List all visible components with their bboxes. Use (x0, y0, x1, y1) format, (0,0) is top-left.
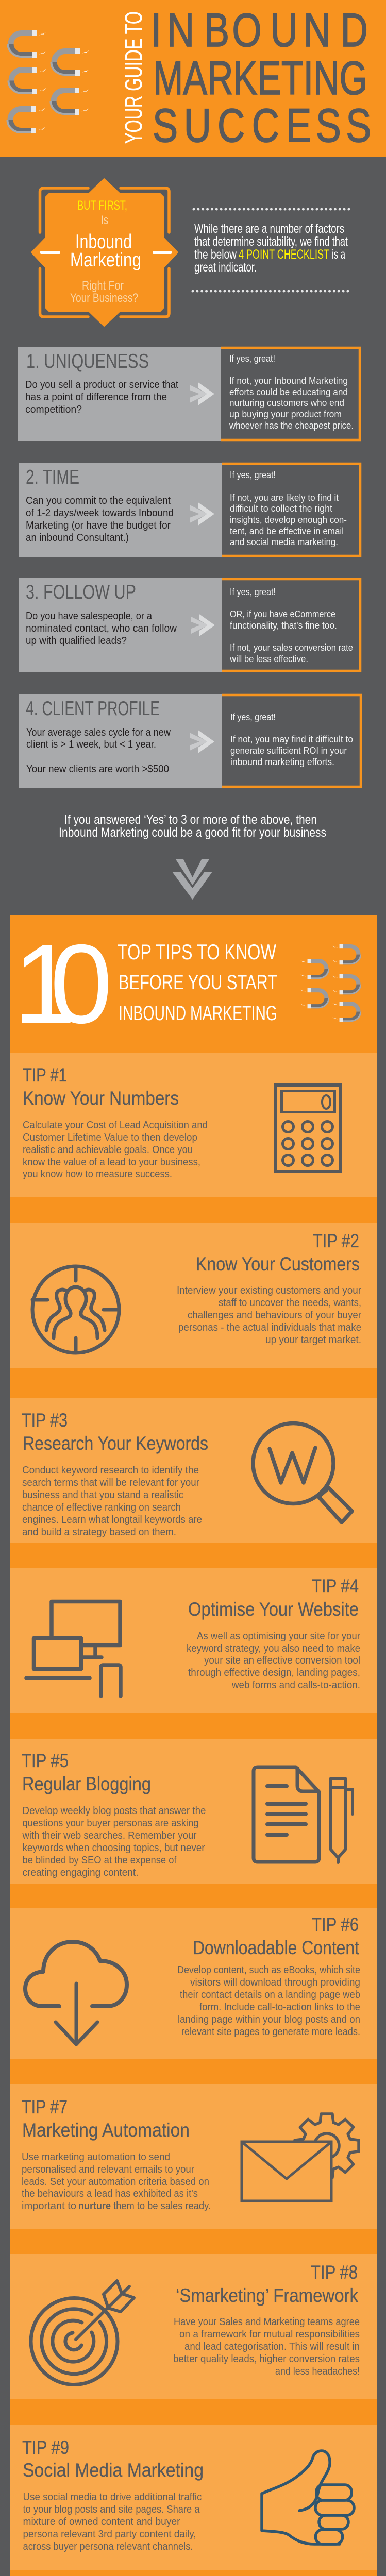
tip 4: TIP #4 (312, 1575, 359, 1597)
tip 6: Downloadable Content (193, 1937, 360, 1958)
panel: 4 client profile: inbound marketing efforts. (230, 757, 334, 767)
tip 9: persona relevant 3rd party content daily, (23, 2529, 196, 2540)
conclusion text (59, 812, 326, 840)
panel: 2 time (19, 463, 360, 557)
tip 4: web forms and calls-to-action. (231, 1680, 360, 1691)
tip 5: be blinded by SEO at the expense of (23, 1855, 177, 1866)
tip 9: mixture of owned content and buyer (23, 2516, 180, 2528)
icon: double chevron (190, 382, 214, 405)
tip 2: TIP #2 (313, 1230, 359, 1251)
tip 8: TIP #8 (311, 2262, 358, 2283)
title: inbound marketing success (151, 4, 371, 152)
panel: 1 uniqueness: has a point of difference from the (25, 392, 167, 403)
panel: 4 client profile: 4. CLIENT PROFILE (26, 698, 160, 720)
panel: 2 time: Marketing (or have the budget for (26, 520, 171, 531)
tip 6: form. Include call-to-action links to the (199, 2002, 360, 2013)
tip 1: TIP #1 (23, 1064, 67, 1086)
callout: but first: Inbound (75, 231, 132, 253)
panel: 3 follow up: functionality, that's fine too. (230, 620, 337, 631)
tip 4: Optimise Your Website (188, 1599, 359, 1620)
callout: but first (31, 179, 178, 326)
panel: 3 follow up (19, 578, 360, 672)
tip 1: realistic and achievable goals. Once you (23, 1144, 193, 1156)
heading: 10 top tips: 0 (50, 922, 112, 1047)
tip 8: better quality leads, higher conversion rates (173, 2353, 360, 2365)
heading: 10 top tips: BEFORE YOU START (119, 971, 277, 994)
intro paragraph: is a (332, 247, 345, 262)
tip 5: with their web searches. Remember your (22, 1830, 197, 1841)
panel: 2 time: Can you commit to the equivalent (26, 495, 171, 506)
panel: 4 client profile: If yes, great! (230, 712, 276, 722)
panel: 3 follow up: nominated contact, who can follow (26, 623, 177, 634)
panel: 1 uniqueness: competition? (25, 404, 82, 415)
tip 2: personas - the actual individuals that make (178, 1322, 361, 1333)
icon: devices (26, 1601, 121, 1696)
panel: 3 follow up: up with qualified leads? (26, 635, 127, 647)
icon: target and arrow (31, 2281, 134, 2384)
tip 8: and less headaches! (275, 2366, 360, 2377)
icon: email and gear (242, 2114, 359, 2201)
tip 9: Social Media Marketing (23, 2460, 204, 2481)
icon: customer target (32, 1266, 119, 1353)
panel: 2 time: 2. TIME (26, 466, 79, 488)
tip 4: As well as optimising your site for your (197, 1631, 360, 1642)
panel: 3 follow up: Do you have salespeople, or a (26, 611, 153, 622)
panel: 3 follow up: If yes, great! (230, 587, 276, 597)
callout: but first: BUT FIRST, (77, 198, 127, 213)
icon: magnifier (253, 1423, 352, 1522)
icon: large down chevron (172, 859, 212, 900)
panel: 1 uniqueness: Do you sell a product or service that (25, 379, 178, 391)
intro paragraph: the below (194, 247, 237, 262)
tip 4 (10, 1568, 377, 1713)
header banner (0, 0, 386, 157)
tip 7: Marketing Automation (22, 2120, 190, 2141)
tip 1: you know how to measure success. (23, 1168, 172, 1180)
tip 9: Use social media to drive additional traffic (23, 2492, 202, 2503)
intro paragraph (194, 222, 348, 275)
icon: double chevron (190, 503, 214, 526)
tip 3: search terms that will be relevant for your (22, 1477, 199, 1488)
tip 5: keywords when choosing topics, but never (23, 1842, 205, 1854)
tip 2: Interview your existing customers and your (177, 1285, 361, 1296)
panel: 3 follow up: will be less effective. (229, 654, 308, 664)
tip 3: engines. Learn what longtail keywords are (22, 1514, 202, 1526)
title: inbound marketing success: SUCCESS (153, 99, 371, 152)
tip 3: and build a strategy based on them. (22, 1527, 176, 1538)
tip 5: Regular Blogging (22, 1773, 151, 1794)
panel: 4 client profile (19, 694, 361, 788)
panel: 2 time: tent, and be effective in email (230, 526, 344, 536)
panel: 4 client profile: client is > 1 week, but < 1 year. (26, 739, 156, 750)
tip 7: personalised and relevant emails to your (22, 2164, 194, 2175)
tip 9: TIP #9 (22, 2437, 69, 2458)
tip 7: nurture (78, 2200, 111, 2212)
panel: 2 time: difficult to collect the right (230, 503, 332, 514)
tip 9 (10, 2425, 377, 2570)
tip 2: up your target market. (265, 1334, 361, 1346)
icon: cloud download (25, 1942, 127, 2044)
callout: but first: Is (101, 213, 108, 227)
heading: 10 top tips (13, 922, 277, 1047)
callout: but first: Your Business? (70, 291, 138, 305)
tip 1 (10, 1053, 377, 1197)
conclusion text: Inbound Marketing could be a good fit for your business (59, 825, 326, 840)
tip 4: your site an effective conversion tool (204, 1655, 360, 1666)
panel: 1 uniqueness: up buying your product from (229, 409, 342, 419)
tip 1: know the value of a lead to your business, (23, 1157, 200, 1168)
tip 6: relevant site pages to generate more leads. (181, 2026, 360, 2038)
panel: 4 client profile: generate sufficient ROI in your (230, 745, 347, 756)
tip 3: Research Your Keywords (23, 1433, 208, 1454)
heading: 10 top tips: TOP TIPS TO KNOW (118, 940, 276, 964)
panel: 2 time: If not, you are likely to find it (230, 493, 339, 503)
tip 3: business and that you stand a realistic (22, 1489, 183, 1501)
panel: 1 uniqueness: If not, your Inbound Marketing (229, 376, 348, 386)
intro paragraph: great indicator. (194, 260, 257, 275)
tip 8: Have your Sales and Marketing teams agree (174, 2316, 360, 2328)
tip 7: leads. Set your automation criteria based on (22, 2176, 209, 2188)
tip 3: Conduct keyword research to identify the (22, 1465, 199, 1476)
callout: but first: Right For (82, 279, 124, 293)
tip 2 (10, 1223, 377, 1368)
panel: 1 uniqueness: If yes, great! (229, 353, 275, 364)
panel: 1 uniqueness: nurturing customers who end (229, 398, 344, 408)
tip 5: TIP #5 (22, 1750, 69, 1771)
tip 8: and lead categorisation. This will result in (184, 2341, 360, 2352)
panel: 4 client profile: Your average sales cycle for a new (26, 727, 171, 738)
tip 8: ‘Smarketing’ Framework (176, 2285, 358, 2306)
tip 2: challenges and behaviours of your buyer (188, 1310, 361, 1321)
tip 4: keyword strategy, you also need to make (187, 1643, 360, 1654)
tip 7: TIP #7 (22, 2096, 68, 2117)
tip 8: on a framework for mutual responsibilities (179, 2329, 360, 2340)
tip 7 (10, 2084, 377, 2229)
panel: 3 follow up: 3. FOLLOW UP (26, 581, 136, 603)
icon: double chevron (191, 614, 215, 637)
tip 6: landing page within your blog posts and on (178, 2014, 360, 2025)
icon: document and pen (254, 1767, 353, 1862)
panel: 3 follow up: If not, your sales conversion rate (230, 642, 353, 653)
panel: top tips (10, 915, 377, 2576)
icon: small magnets (300, 944, 361, 1022)
tip 6: their contact details on a landing page web (180, 1989, 360, 2001)
panel: 1 uniqueness (18, 347, 360, 441)
tip 3: chance of effective ranking on search (22, 1502, 181, 1513)
icon: calculator (275, 1085, 341, 1172)
tip 5: Develop weekly blog posts that answer the (23, 1805, 206, 1817)
tip 6: TIP #6 (312, 1914, 359, 1935)
conclusion text: If you answered ‘Yes’ to 3 or more of the above, then (64, 812, 317, 827)
panel: 1 uniqueness: 1. UNIQUENESS (26, 350, 149, 372)
icon: double chevron (190, 731, 214, 753)
tip 2: Know Your Customers (196, 1253, 360, 1275)
tip 8 (10, 2254, 377, 2399)
icon: thumbs up (262, 2451, 354, 2544)
panel: 2 time: and social media marketing. (230, 537, 338, 547)
tip 7: Use marketing automation to send (22, 2151, 170, 2163)
title: inbound marketing success: INBOUND (151, 4, 368, 57)
tip 2: staff to uncover the needs, wants, (219, 1297, 361, 1309)
tip 5: questions your buyer personas are asking (23, 1818, 199, 1829)
panel: 3 follow up: OR, if you have eCommerce (230, 609, 335, 619)
tip 3 (10, 1398, 377, 1543)
panel: 4 client profile: Your new clients are worth >$500 (26, 764, 169, 775)
panel: 1 uniqueness: whoever has the cheapest price. (229, 420, 354, 431)
tip 7: important to (22, 2200, 76, 2212)
heading: 10 top tips: INBOUND MARKETING (119, 1002, 277, 1025)
panel: 2 time: of 1-2 days/week towards Inbound (26, 507, 174, 519)
tip 1: Customer Lifetime Value to then develop (23, 1132, 197, 1143)
tip 6: Develop content, such as eBooks, which site (177, 1964, 360, 1976)
panel: 2 time: If yes, great! (230, 470, 276, 480)
tip 5: creating engaging content. (23, 1867, 138, 1878)
panel: 4 client profile: If not, you may find it difficult to (230, 734, 353, 744)
panel: 2 time: insights, develop enough con- (230, 515, 347, 525)
tip 9: across buyer persona relevant channels. (23, 2541, 193, 2552)
heading: 10 top tips: 1 (13, 922, 76, 1047)
tip 6 (10, 1908, 377, 2059)
callout: but first: Marketing (70, 249, 141, 271)
tip 6: visitors will download through providing (190, 1977, 360, 1988)
icon: magnet group (7, 30, 89, 133)
intro paragraph: 4 POINT CHECKLIST (239, 247, 329, 262)
tip 5 (10, 1739, 377, 1884)
tip 3: TIP #3 (22, 1410, 68, 1431)
tip 7: the behaviours a lead has exhibited as it's (22, 2188, 198, 2199)
tip 4: through effective design, landing pages, (188, 1667, 360, 1679)
tip 1: Know Your Numbers (23, 1088, 179, 1109)
tip 7: them to be sales ready. (113, 2200, 211, 2212)
panel: 1 uniqueness: efforts could be educating and (229, 387, 348, 397)
tip 1: Calculate your Cost of Lead Acquisition and (23, 1120, 208, 1131)
panel: 2 time: an inbound Consultant.) (26, 532, 129, 544)
tip 9: to your blog posts and site pages. Share a (23, 2504, 200, 2515)
